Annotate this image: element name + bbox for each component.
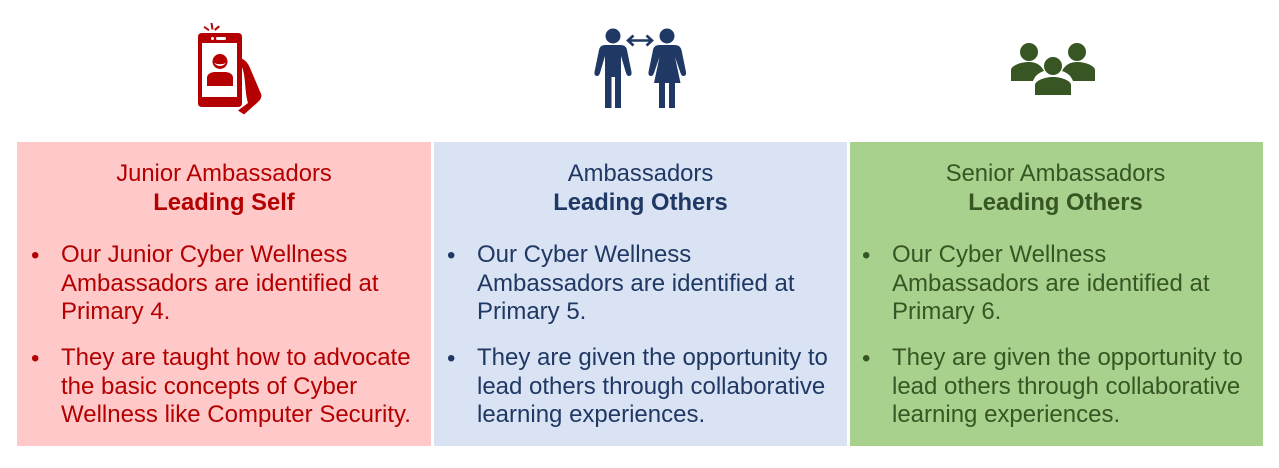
text block: Senior Ambassadors bullets: They are given the opportunity to bbox=[892, 344, 1243, 371]
heading: Junior Ambassadors, Leading Self: Junior Ambassadors bbox=[116, 160, 332, 187]
text block: Ambassadors bullets: Ambassadors are identified at bbox=[477, 270, 795, 297]
heading: Junior Ambassadors, Leading Self bbox=[116, 160, 332, 216]
text block: Ambassadors bullets: Primary 5. bbox=[477, 298, 586, 325]
text block: Ambassadors bullets: They are given the opportunity to bbox=[477, 344, 828, 371]
text block: Junior Ambassadors bullets: Wellness like Computer Security. bbox=[61, 401, 411, 428]
text block: Junior Ambassadors bullets: Our Junior Cyber Wellness bbox=[61, 241, 347, 268]
text block: Senior Ambassadors bullets: Our Cyber Wellness bbox=[892, 241, 1106, 268]
text block: Ambassadors bullets: • bbox=[447, 242, 455, 269]
heading: Junior Ambassadors, Leading Self: Leading Self bbox=[153, 189, 295, 216]
text block: Senior Ambassadors bullets: lead others through collaborative bbox=[892, 373, 1240, 400]
icon: group of three people bbox=[1011, 43, 1095, 95]
text block: Senior Ambassadors bullets: learning experiences. bbox=[892, 401, 1120, 428]
text block: Junior Ambassadors bullets bbox=[31, 241, 411, 428]
text block: Ambassadors bullets: learning experiences. bbox=[477, 401, 705, 428]
heading: Senior Ambassadors, Leading Others: Leading Others bbox=[968, 189, 1143, 216]
heading: Ambassadors, Leading Others: Ambassadors bbox=[568, 160, 713, 187]
heading: Ambassadors, Leading Others: Leading Others bbox=[553, 189, 728, 216]
text block: Ambassadors bullets: lead others through collaborative bbox=[477, 373, 825, 400]
text block: Ambassadors bullets: • bbox=[447, 345, 455, 372]
text block: Junior Ambassadors bullets: They are taught how to advocate bbox=[61, 344, 411, 371]
text block: Senior Ambassadors bullets: • bbox=[862, 242, 870, 269]
text block: Junior Ambassadors bullets: the basic concepts of Cyber bbox=[61, 373, 357, 400]
heading: Ambassadors, Leading Others bbox=[553, 160, 728, 216]
panel: Junior Ambassadors bbox=[17, 142, 431, 446]
text block: Ambassadors bullets bbox=[447, 241, 828, 428]
text block: Junior Ambassadors bullets: Ambassadors are identified at bbox=[61, 270, 379, 297]
text block: Senior Ambassadors bullets: Ambassadors are identified at bbox=[892, 270, 1210, 297]
panel: Ambassadors bbox=[434, 142, 847, 446]
text block: Senior Ambassadors bullets: Primary 6. bbox=[892, 298, 1001, 325]
text block: Senior Ambassadors bullets: • bbox=[862, 345, 870, 372]
heading: Senior Ambassadors, Leading Others bbox=[946, 160, 1165, 216]
heading: Senior Ambassadors, Leading Others: Senior Ambassadors bbox=[946, 160, 1165, 187]
icon: two people with double-headed arrow bbox=[594, 28, 686, 108]
text block: Junior Ambassadors bullets: Primary 4. bbox=[61, 298, 170, 325]
text block: Junior Ambassadors bullets: • bbox=[31, 345, 39, 372]
icon: hand holding smartphone bbox=[198, 23, 262, 114]
text block: Junior Ambassadors bullets: • bbox=[31, 242, 39, 269]
text block: Senior Ambassadors bullets bbox=[862, 241, 1243, 428]
panel: Senior Ambassadors bbox=[850, 142, 1263, 446]
text block: Ambassadors bullets: Our Cyber Wellness bbox=[477, 241, 691, 268]
